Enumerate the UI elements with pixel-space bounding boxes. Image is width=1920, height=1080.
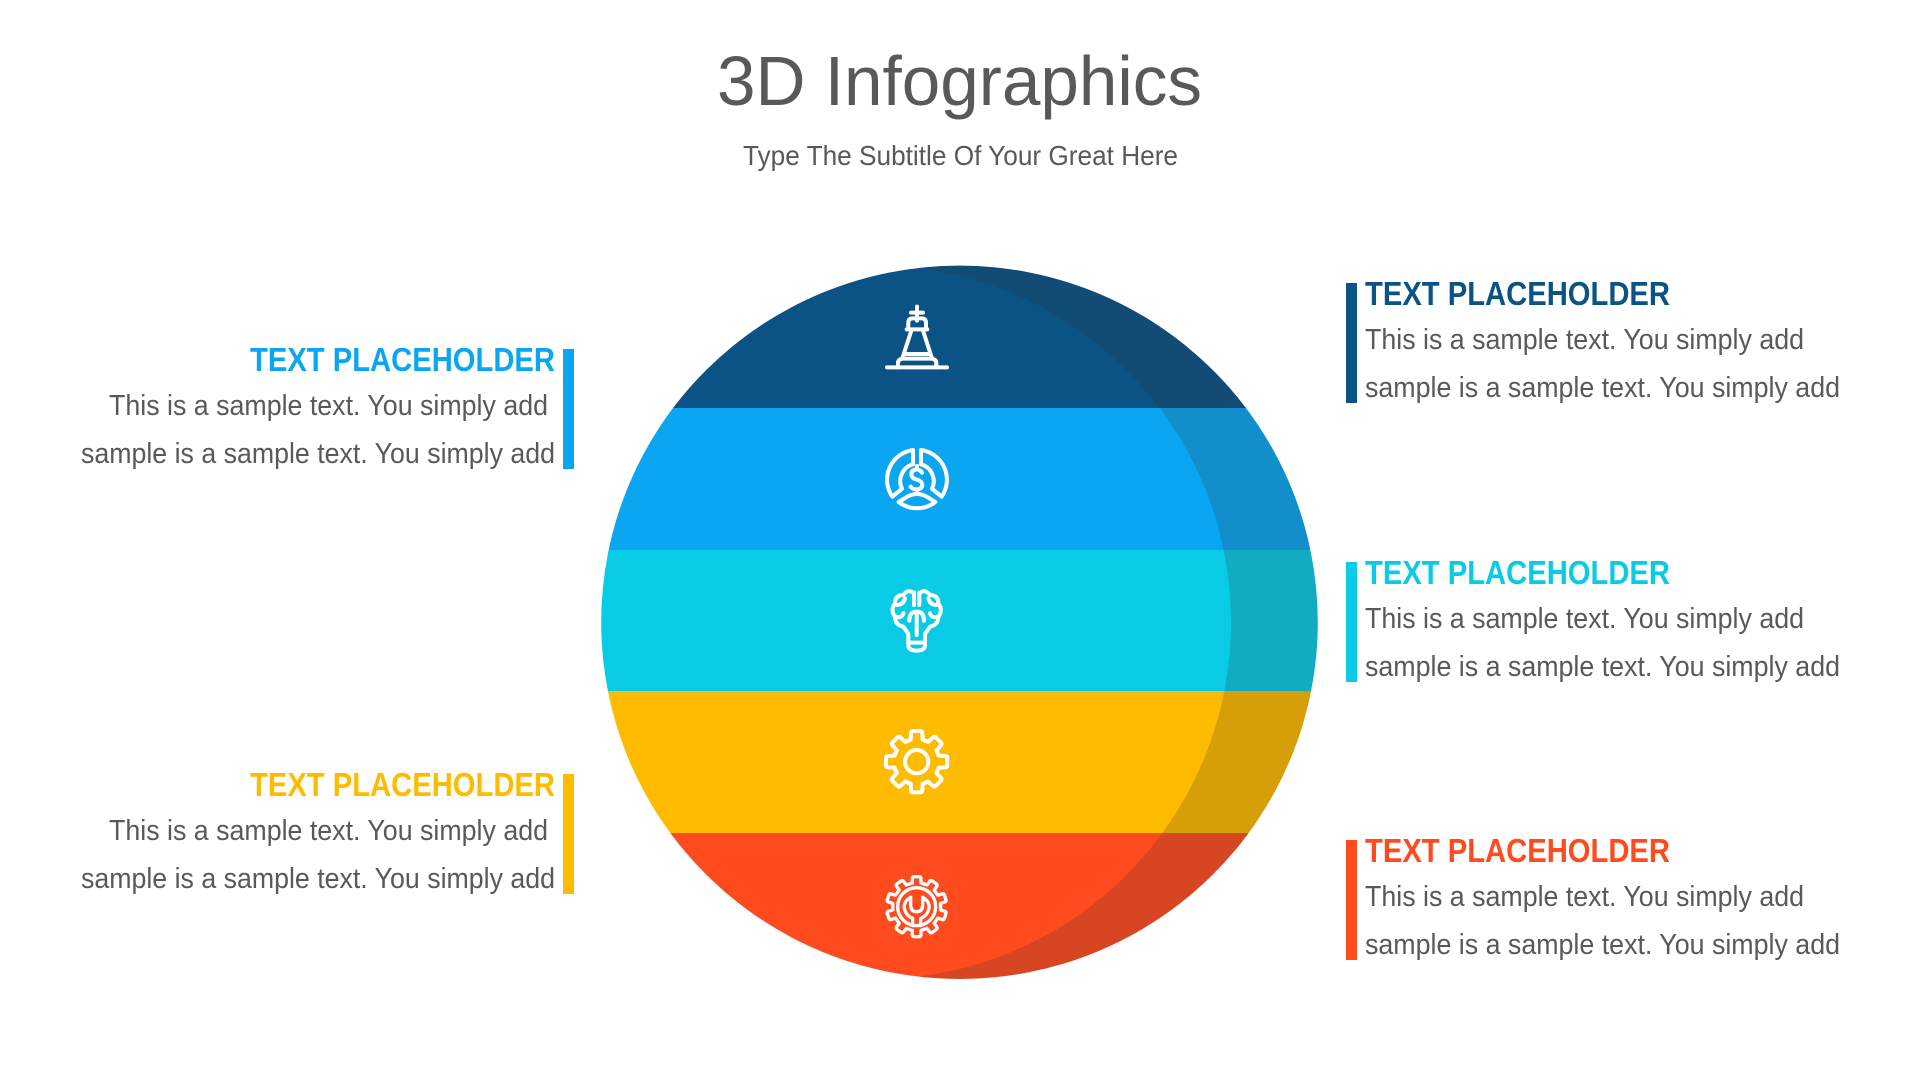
title: 3D Infographics	[717, 42, 1202, 120]
body text: This is a sample text. You simply add	[1365, 324, 1804, 356]
right text block: navy	[1346, 275, 1840, 404]
icon: gear	[886, 731, 947, 792]
left text block: yellow	[81, 766, 574, 895]
body text line 2: sample is a sample text. You simply add	[81, 863, 555, 895]
accent bar	[563, 349, 574, 469]
body text: This is a sample text. You simply add	[109, 815, 548, 847]
band 1: navy	[673, 266, 1246, 408]
body text: This is a sample text. You simply add	[1365, 881, 1804, 913]
band 5: red	[670, 833, 1248, 979]
body text: This is a sample text. You simply add	[1365, 603, 1804, 635]
body text line 2: sample is a sample text. You simply add	[81, 438, 555, 470]
accent bar	[563, 774, 574, 894]
body text: This is a sample text. You simply add	[109, 390, 548, 422]
left text block: blue	[81, 341, 574, 470]
sphere made of five coloured bands	[601, 266, 1318, 979]
right text block: red	[1346, 832, 1840, 961]
subtitle: Type The Subtitle Of Your Great Here	[743, 140, 1178, 171]
heading: TEXT PLACEHOLDER	[1365, 832, 1670, 869]
heading: TEXT PLACEHOLDER	[1365, 275, 1670, 312]
accent bar	[1346, 283, 1357, 403]
band 2: blue	[600, 408, 1320, 550]
accent bar	[1346, 840, 1357, 960]
heading: TEXT PLACEHOLDER	[250, 766, 555, 803]
shaded crescent on right side	[919, 266, 1318, 979]
body text line 2: sample is a sample text. You simply add	[1365, 651, 1840, 683]
band 3: cyan	[600, 550, 1320, 691]
icon: dollar target	[887, 450, 947, 508]
accent bar	[1346, 562, 1357, 682]
band 4: yellow	[600, 691, 1320, 833]
body text line 2: sample is a sample text. You simply add	[1365, 372, 1840, 404]
heading: TEXT PLACEHOLDER	[1365, 554, 1670, 591]
body text line 2: sample is a sample text. You simply add	[1365, 929, 1840, 961]
icon: brain bulb	[892, 591, 941, 651]
heading: TEXT PLACEHOLDER	[250, 341, 555, 378]
right text block: cyan	[1346, 554, 1840, 683]
icon: chess king	[887, 307, 947, 367]
icon: gear with wrench	[886, 877, 947, 937]
